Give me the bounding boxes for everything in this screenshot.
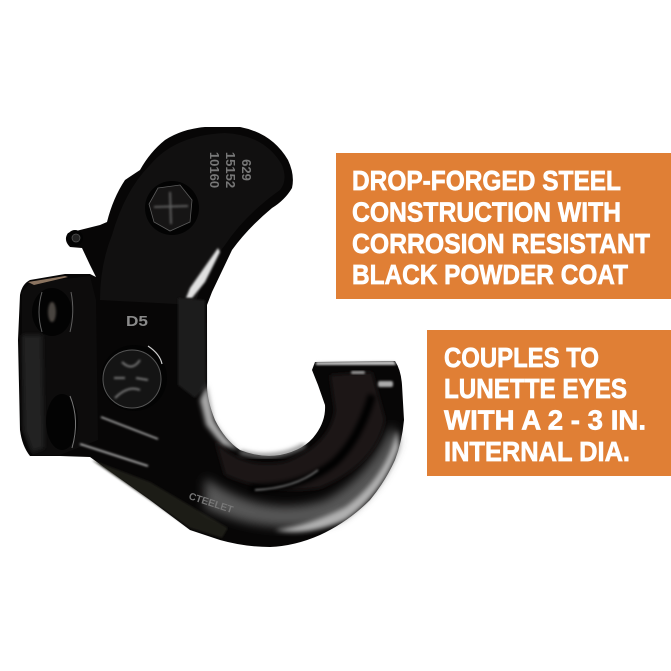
hook dark groove	[250, 395, 372, 488]
callout text: construction: BLACK POWDER COAT	[352, 259, 628, 290]
callout text: coupling: LUNETTE EYES	[444, 373, 627, 404]
callout text: coupling: COUPLES TO	[444, 342, 599, 373]
hook silhouette	[18, 127, 404, 547]
inner hook gleam	[200, 385, 240, 450]
embossed lettering on lever: 15152	[223, 152, 238, 188]
lever body shading	[100, 133, 285, 305]
cast mark D5: D5	[126, 313, 148, 330]
inner rim gleam	[240, 445, 305, 456]
lever highlight band	[186, 248, 220, 298]
top hex bolt	[145, 181, 199, 235]
hook tip top edge	[316, 361, 396, 365]
hook outer gleam	[275, 430, 399, 532]
left mounting plate	[22, 276, 98, 455]
callout text: coupling: INTERNAL DIA.	[444, 436, 630, 467]
embossed lettering on lever: 10160	[207, 152, 222, 188]
latch knob	[67, 230, 83, 246]
product photo: pintle hook	[18, 127, 404, 547]
callout text: coupling	[444, 342, 646, 467]
hook shoulder gleam	[351, 371, 365, 374]
cast brand lettering: CTEELET	[187, 491, 234, 516]
callout: coupling	[427, 330, 671, 476]
hook lower band	[205, 425, 398, 527]
hook bowl shading	[215, 372, 385, 490]
bracket lower highlights	[101, 417, 158, 439]
callout text: coupling: WITH A 2 - 3 IN.	[444, 404, 646, 436]
bracket plate	[178, 298, 206, 398]
embossed lettering on lever: 629	[239, 159, 254, 181]
hook tip gleam	[378, 381, 393, 387]
callout text: construction	[352, 165, 650, 290]
callout text: construction: DROP-FORGED STEEL	[352, 165, 621, 196]
lower arm shading	[92, 460, 228, 538]
callout text: construction: CONSTRUCTION WITH	[352, 196, 621, 228]
embossed lettering on lever	[207, 152, 254, 188]
lower round bolt	[101, 345, 167, 411]
callout: construction	[336, 153, 671, 299]
